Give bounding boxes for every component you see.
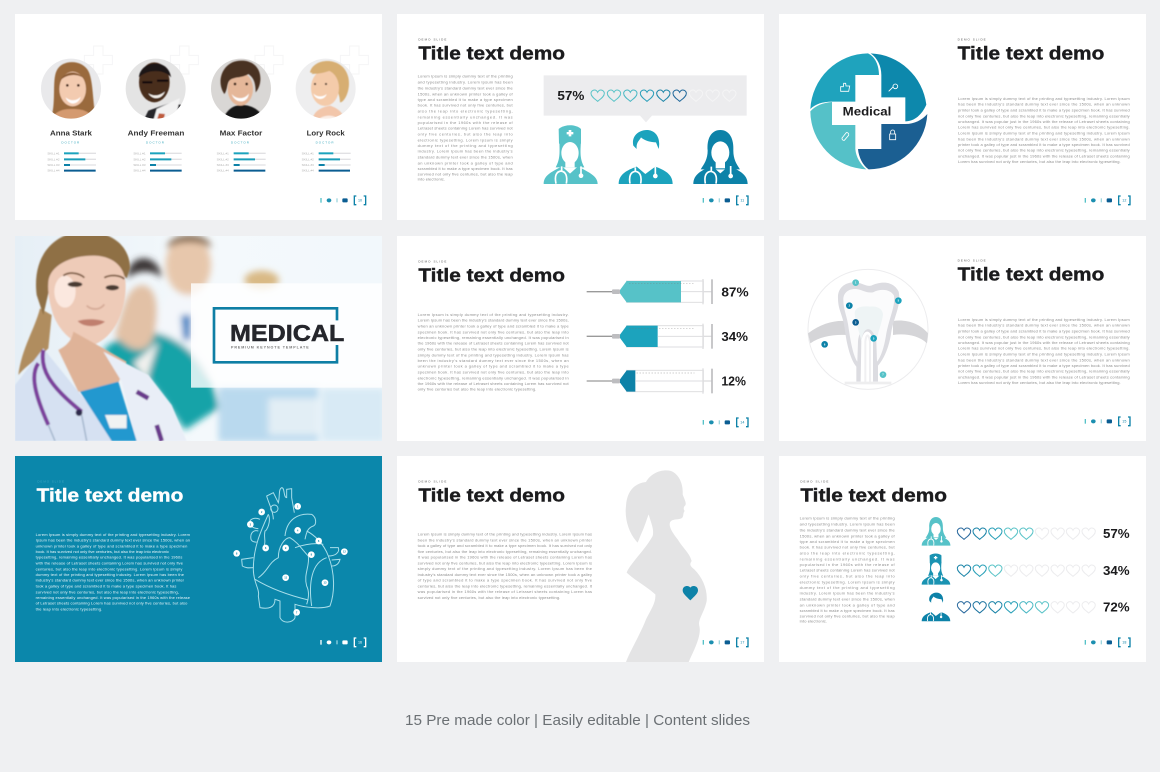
body text: has been the industry's standard dummy text ever since the 1500s, when an unknown bbox=[958, 102, 1130, 107]
body text: book. It has survived not only five centuries, but bbox=[800, 545, 896, 550]
icon: wrench bbox=[889, 84, 898, 91]
heart markers: 2 bbox=[261, 510, 263, 514]
body text: electronic typesetting. Lorem Ipsum is simply bbox=[800, 579, 895, 584]
body text: It was popularised in the 1960s with the release of Letraset sheets containing Lorem has bbox=[418, 555, 592, 560]
body text: Letraset sheets containing Lorem has survived not bbox=[800, 568, 896, 573]
body text: Lorem has survived not only five centuries, but also the leap into electronic typesetting. bbox=[958, 159, 1121, 164]
body text: five centuries, but also the leap into electronic typesetting, remaining essentially unchanged. bbox=[418, 549, 592, 554]
names: Andy Freeman bbox=[128, 130, 184, 137]
skill bars: Anna Stark: SKILL #3 bbox=[47, 163, 60, 167]
diagram: four-part circle with cross bbox=[810, 53, 927, 169]
label: DEMO SLIDE bbox=[418, 38, 447, 42]
footer: social icons and page number: 10 bbox=[358, 199, 362, 203]
body text: electronic typesetting. Lorem Ipsum is simply bbox=[418, 137, 513, 142]
body text: specimen book. It has survived not only five centuries, but also the leap into bbox=[418, 329, 569, 334]
body text: unknown printer took a galley of type and scrambled it to make a type bbox=[418, 364, 569, 369]
names: DOCTOR bbox=[316, 140, 335, 144]
heart markers: 9 bbox=[285, 546, 287, 550]
illustration: pregnant silhouette bbox=[626, 470, 707, 662]
body text: the leap into electronic typesetting. bbox=[36, 606, 102, 611]
body text: electronic typesetting, remaining essentially unchanged. It was popularised in bbox=[418, 335, 569, 340]
body text: Lorem Ipsum is simply dummy text of the printing and typesetting industry. Lorem Ipsum has bbox=[418, 532, 592, 537]
icon: thumbs up bbox=[841, 83, 850, 91]
skill bars: Max Factor: SKILL #1 bbox=[217, 151, 229, 155]
panel: translucent title panel bbox=[191, 283, 382, 388]
body text: unchanged. It was popular just in the 1960s with the release of Letraset sheets containing bbox=[958, 153, 1130, 158]
heart markers: 11 bbox=[284, 576, 288, 580]
body text: dummy text of the printing and typesetting bbox=[800, 585, 895, 590]
body text: and typesetting industry. Lorem Ipsum has been bbox=[800, 522, 895, 527]
slide 5: syringe percentages bbox=[397, 236, 764, 441]
body text: survived not only five centuries, but also the leap bbox=[418, 172, 513, 177]
body text: unknown printer took a galley of type and scrambled it to make a type specimen bbox=[36, 543, 187, 548]
body text: of type and scrambled it to make a type specimen book. It has survived not only five bbox=[418, 578, 593, 583]
row: 57 percent hearts: 57% bbox=[1103, 527, 1130, 541]
footer: social icons and page number: 14 bbox=[740, 421, 744, 425]
row: 57 percent hearts bbox=[922, 517, 1130, 546]
label: DEMO SLIDE bbox=[958, 258, 986, 262]
body text: popularised in the 1960s with the release of bbox=[800, 562, 896, 567]
body text: Lorem Ipsum is simply dummy text of the printing and typesetting industry. Lorem bbox=[36, 532, 191, 537]
syringe chart: 34 percent: 34% bbox=[721, 330, 748, 344]
body text: 1500s, when an unknown printer took a galley of bbox=[800, 533, 896, 538]
body text: survived not only five centuries, but also the leap into electronic typesetting. Lorem Ipsum is bbox=[418, 560, 592, 565]
body text: was popularised in the 1960s with the release of Letraset sheets containing Lorem has bbox=[418, 589, 592, 594]
title: Title text demo bbox=[418, 485, 565, 506]
body text: Lorem Ipsum is simply dummy text of the printing and typesetting industry. Lorem Ipsum bbox=[958, 130, 1130, 135]
syringe chart: 12 percent: 12% bbox=[721, 375, 746, 389]
marker 7: 7 bbox=[882, 373, 884, 377]
body text: survived not only five centuries, but also the leap into electronic typesetting. bbox=[418, 595, 560, 600]
title: Title text demo bbox=[418, 43, 565, 64]
body text bbox=[418, 532, 593, 600]
body text: into electronic. bbox=[418, 177, 445, 182]
heart markers: 8 bbox=[236, 551, 238, 555]
body text: typesetting, remaining essentially unchanged. It was popularised in the 1960s bbox=[36, 555, 182, 560]
body text bbox=[800, 516, 896, 624]
body text: type and scrambled it to make a type specimen bbox=[800, 539, 895, 544]
callout: 57 percent hearts bbox=[544, 75, 747, 122]
body text: centuries, but also the leap into electronic typesetting, remaining essentially unchanged. It bbox=[418, 583, 593, 588]
body text: Lorem has survived not only five centuries, but also the leap into electronic typesetting. bbox=[958, 380, 1121, 385]
body text: popularised in the 1960s with the release of bbox=[418, 120, 514, 125]
body text: the 1960s with the release of Letraset sheets containing Lorem has survived not bbox=[418, 381, 570, 386]
title: Title text demo bbox=[958, 264, 1104, 285]
body text: been the industry's standard dummy text ever since the 1500s, when an unknown printer bbox=[418, 537, 593, 542]
skill bars: Andy Freeman bbox=[133, 151, 182, 173]
skill bars: Max Factor: SKILL #4 bbox=[217, 169, 229, 173]
heart markers: 8 bbox=[311, 553, 313, 557]
slide 8: pregnancy silhouette bbox=[397, 456, 764, 662]
body text: industry. Lorem Ipsum has been the industry's bbox=[800, 591, 895, 596]
body text: with the release of Letraset sheets containing Lorem has survived not only five bbox=[36, 561, 184, 566]
body text: Letraset sheets containing Lorem has survived not bbox=[418, 126, 514, 131]
names: DOCTOR bbox=[61, 140, 80, 144]
icon: pill bbox=[842, 133, 849, 140]
body text: simply dummy text of the printing and typesetting industry. Lorem Ipsum has been the bbox=[418, 566, 593, 571]
body text: not only five centuries, but also the leap into electronic typesetting, remaining essentially bbox=[958, 369, 1130, 374]
skill bars: Andy Freeman: SKILL #4 bbox=[133, 169, 146, 173]
heart markers: 6 bbox=[318, 539, 320, 543]
body text: type and scrambled it to make a type specimen bbox=[418, 97, 513, 102]
body text: unchanged. It was popular just in the 1960s with the release of Letraset sheets containing bbox=[958, 340, 1130, 345]
marker 6: 6 bbox=[824, 342, 826, 346]
skill bars: Anna Stark: SKILL #1 bbox=[47, 151, 60, 155]
photo: Max Factor bbox=[210, 57, 273, 121]
body text: remaining essentially unchanged. It was bbox=[800, 556, 895, 561]
body text: not only five centuries, but also the leap into electronic typesetting, remaining essentially bbox=[958, 148, 1130, 153]
heart markers: 12 bbox=[343, 550, 346, 554]
logo: Medical frame bbox=[214, 308, 344, 362]
marker 3: 2 bbox=[849, 304, 851, 308]
body text: has been the industry's standard dummy text ever since the 1500s, when an unknown bbox=[958, 357, 1130, 362]
heart markers: 7 bbox=[296, 610, 298, 614]
footer: social icons and page number bbox=[1085, 417, 1130, 426]
body text: took a galley of type and scrambled it to make a type specimen book. It has bbox=[36, 583, 176, 588]
skill bars: Andy Freeman: SKILL #2 bbox=[133, 157, 146, 161]
footer: social icons and page number bbox=[703, 196, 748, 205]
label: DEMO SLIDE bbox=[958, 37, 986, 41]
body text: industry's standard dummy text ever since the 1500s, when an unknown printer bbox=[36, 578, 185, 583]
footer: social icons and page number: 15 bbox=[1122, 420, 1126, 424]
body text: also the leap into electronic typesetting, bbox=[800, 550, 895, 555]
body text: standard dummy text ever since the 1500s, when bbox=[800, 597, 895, 602]
body text: scrambled it to make a type specimen book. It has bbox=[800, 608, 895, 613]
logo: Medical frame: PREMIUM KEYNOTE TEMPLATE bbox=[231, 345, 309, 349]
body text: Lorem has survived not only five centuries, but also the leap into electronic typesetting. bbox=[958, 125, 1130, 130]
slide 3: medical cross diagram bbox=[779, 14, 1146, 220]
footer: social icons and page number bbox=[1085, 196, 1130, 205]
slide 6: tooth diagram bbox=[779, 236, 1146, 441]
body text: Lorem Ipsum is simply dummy text of the printing and typesetting industry. Lorem Ipsum bbox=[958, 96, 1130, 101]
body text: Lorem Ipsum is simply dummy text of the printing and typesetting industry. Lorem Ipsum bbox=[958, 351, 1130, 356]
body text: only five centuries but also the leap into electronic typesetting. bbox=[418, 387, 536, 392]
caption: 15 Pre made color | Easily editable | Content slides bbox=[405, 712, 750, 729]
heart markers bbox=[233, 503, 348, 616]
heart markers: 3 bbox=[250, 522, 252, 526]
names: DOCTOR bbox=[146, 140, 165, 144]
body text: unchanged. It was popular just in the 1960s with the release of Letraset sheets containing bbox=[958, 374, 1130, 379]
body text: Lorem Ipsum has been the industry's standard dummy text ever since the 1500s, bbox=[418, 318, 569, 323]
callout: 57 percent hearts: 57% bbox=[557, 89, 584, 103]
body text: into electronic. bbox=[800, 619, 827, 624]
skill bars: Lory Rock: SKILL #4 bbox=[302, 169, 314, 173]
marker 5: 5 bbox=[873, 336, 875, 340]
photo: Andy Freeman bbox=[126, 58, 186, 119]
skill bars: Andy Freeman: SKILL #1 bbox=[133, 151, 146, 155]
body text: scrambled it to make a type specimen book. It has bbox=[418, 166, 513, 171]
body text: been the industry's standard dummy text ever since the 1500s, when an bbox=[418, 358, 569, 363]
body text: dummy text of the printing and typesetting bbox=[418, 143, 513, 148]
body text: not only five centuries, but also the leap into electronic typesetting, remaining essentially bbox=[958, 334, 1130, 339]
slide 1: team profiles bbox=[15, 14, 382, 220]
body text: book. It has survived not only five centuries, but bbox=[418, 103, 514, 108]
title: Title text demo bbox=[958, 43, 1104, 64]
marker 4: 3 bbox=[855, 320, 857, 324]
body text: Lorem Ipsum is simply dummy text of the printing and typesetting industry. Lorem Ipsum bbox=[958, 317, 1130, 322]
skill bars: Andy Freeman: SKILL #3 bbox=[133, 163, 146, 167]
names: Anna Stark bbox=[50, 130, 92, 137]
skill bars: Lory Rock bbox=[302, 151, 351, 173]
body text: electronic typesetting, remaining essentially unchanged. It was popularised in bbox=[418, 375, 569, 380]
body text: unchanged. It was popular just in the 1960s with the release of Letraset sheets containing bbox=[958, 119, 1130, 124]
row: 72 percent hearts bbox=[922, 593, 1130, 621]
marker 2: 5 bbox=[898, 299, 900, 303]
body text: industry's standard dummy text ever since the 1500s, when an unknown printer took a galley bbox=[418, 572, 592, 577]
icon: heart bbox=[683, 586, 698, 600]
skill bars: Anna Stark bbox=[47, 151, 96, 173]
diagram: heart outline bbox=[242, 488, 340, 622]
footer: social icons and page number bbox=[1085, 638, 1130, 647]
body text: dummy text of the printing and typesetting industry. Lorem Ipsum has been the bbox=[36, 572, 185, 577]
body text: Lorem Ipsum is simply dummy text of the printing bbox=[800, 516, 895, 521]
footer: social icons and page number: 16 bbox=[358, 641, 362, 645]
title: Title text demo bbox=[800, 485, 947, 506]
row: 34 percent hearts: 34% bbox=[1103, 564, 1130, 578]
footer: social icons and page number: 18 bbox=[1122, 641, 1126, 645]
title: Title text demo bbox=[37, 485, 183, 506]
skill bars: Max Factor: SKILL #2 bbox=[217, 157, 229, 161]
body text bbox=[418, 74, 514, 182]
body text: the industry's standard dummy text ever since the bbox=[800, 527, 895, 532]
slide 7: heart diagram on blue bbox=[15, 456, 382, 662]
footer: social icons and page number: 17 bbox=[740, 641, 744, 645]
syringe chart: 12 percent bbox=[587, 368, 746, 394]
heart markers: 6 bbox=[265, 546, 267, 550]
body text: and typesetting industry. Lorem Ipsum has been bbox=[418, 80, 513, 85]
body text: Lorem Ipsum is simply dummy text of the printing and typesetting industry. bbox=[418, 312, 569, 317]
skill bars: Anna Stark: SKILL #2 bbox=[47, 157, 60, 161]
names: DOCTOR bbox=[231, 140, 250, 144]
icon: padlock bbox=[890, 130, 896, 140]
body text: specimen book. It has survived not only five centuries, but also the leap into bbox=[418, 369, 569, 374]
names: Max Factor bbox=[220, 130, 263, 137]
body text: has been the industry's standard dummy text ever since the 1500s, when an unknown bbox=[958, 136, 1130, 141]
body text: not only five centuries, but also the leap into electronic typesetting, remaining essentially bbox=[958, 113, 1130, 118]
label: DEMO SLIDE bbox=[418, 480, 447, 484]
body text: has been the industry's standard dummy text ever since the 1500s, when an unknown bbox=[958, 323, 1130, 328]
skill bars: Max Factor: SKILL #3 bbox=[217, 163, 229, 167]
body text: printer took a galley of type and scrambled it to make a type specimen book. It has survived bbox=[958, 363, 1130, 368]
body text: book. It has survived not only five centuries, but also the leap into electronic bbox=[36, 549, 169, 554]
body text: the 1960s with the release of Letraset sheets containing Lorem has survived not bbox=[418, 341, 570, 346]
body text bbox=[36, 532, 191, 611]
body text: an unknown printer took a galley of type and bbox=[418, 160, 513, 165]
syringe chart: 34 percent bbox=[587, 324, 748, 349]
syringe chart: 87 percent bbox=[587, 279, 749, 304]
photo: Anna Stark bbox=[41, 58, 101, 119]
row: 72 percent hearts: 72% bbox=[1103, 601, 1130, 615]
skill bars: Lory Rock: SKILL #3 bbox=[302, 163, 314, 167]
skill bars: Anna Stark: SKILL #4 bbox=[47, 169, 60, 173]
skill bars: Lory Rock: SKILL #2 bbox=[302, 157, 314, 161]
body text: only five centuries, but also the leap into electronic typesetting. Lorem Ipsum is bbox=[418, 346, 569, 351]
slide 4: cover with photo of medical staff bbox=[15, 232, 385, 442]
slide 2: title, text and people with hearts bbox=[397, 14, 764, 220]
body text: only five centuries, but also the leap into bbox=[418, 132, 513, 137]
heart markers: 1 bbox=[297, 504, 299, 508]
body text: industry. Lorem Ipsum has been the industry's bbox=[418, 149, 513, 154]
skill bars: Max Factor bbox=[217, 151, 266, 173]
footer: social icons and page number bbox=[703, 638, 748, 647]
footer: social icons and page number: 11 bbox=[740, 199, 744, 203]
body text: also the leap into electronic typesetting, bbox=[418, 108, 513, 113]
diagram: tooth anatomy bbox=[808, 269, 928, 389]
heart markers: 4 bbox=[297, 528, 299, 532]
photo: medical staff bbox=[15, 232, 385, 442]
footer: social icons and page number: 12 bbox=[1122, 199, 1126, 203]
body text bbox=[958, 96, 1130, 164]
body text bbox=[958, 317, 1130, 385]
body text: Lorem has survived not only five centuries, but also the leap into electronic typesetting. bbox=[958, 346, 1130, 351]
body text: simply dummy text of the printing and typesetting industry. Lorem Ipsum has bbox=[418, 352, 569, 357]
body text: an unknown printer took a galley of type and bbox=[800, 602, 895, 607]
body text: survived not only five centuries, but also the leap into electronic typesetting, bbox=[36, 589, 179, 594]
body text: remaining essentially unchanged. It was bbox=[418, 114, 513, 119]
names: Lory Rock bbox=[307, 130, 345, 137]
label: DEMO SLIDE bbox=[418, 259, 447, 263]
body text: Lorem Ipsum is simply dummy text of the printing bbox=[418, 74, 513, 79]
body text: printer took a galley of type and scrambled it to make a type specimen book. It has survived bbox=[958, 142, 1130, 147]
names bbox=[50, 130, 345, 144]
label: DEMO SLIDE bbox=[37, 480, 65, 484]
body text: took a galley of type and scrambled it to make a type specimen book. It has survived not only bbox=[418, 543, 592, 548]
body text bbox=[418, 312, 570, 392]
body text: printer took a galley of type and scrambled it to make a type specimen book. It has survived bbox=[958, 328, 1130, 333]
footer: social icons and page number bbox=[703, 418, 748, 427]
slide 9: hearts rating by staff bbox=[779, 456, 1146, 662]
label: Medical: Medical bbox=[843, 105, 891, 119]
body text: only five centuries, but also the leap into bbox=[800, 574, 895, 579]
body text: Ipsum has been the industry's standard dummy text ever since the 1500s, when an bbox=[36, 538, 190, 543]
body text: 1500s, when an unknown printer took a galley of bbox=[418, 91, 514, 96]
skill bars: Lory Rock: SKILL #1 bbox=[302, 151, 314, 155]
body text: survived not only five centuries, but also the leap bbox=[800, 614, 895, 619]
footer: social icons and page number bbox=[321, 196, 366, 205]
body text: printer took a galley of type and scrambled it to make a type specimen book. It has survived bbox=[958, 107, 1130, 112]
footer: social icons and page number bbox=[321, 638, 366, 647]
logo: Medical frame: MEDICAL bbox=[230, 320, 344, 346]
icon: male doctor bbox=[619, 130, 673, 184]
syringe chart: 87 percent: 87% bbox=[721, 285, 749, 299]
body text: centuries, but also the leap into electronic typesetting. Lorem Ipsum is simply bbox=[36, 566, 182, 571]
title: Title text demo bbox=[418, 265, 565, 286]
body text: the industry's standard dummy text ever since the bbox=[418, 85, 513, 90]
body text: of Letraset sheets containing Lorem has survived not only five centuries, but also bbox=[36, 601, 188, 606]
photo: Lory Rock bbox=[295, 57, 357, 121]
marker 1: 1 bbox=[855, 281, 857, 285]
body text: when an unknown printer took a galley of type and scrambled it to make a type bbox=[418, 323, 569, 328]
icon: nurse bbox=[544, 125, 598, 184]
label: DEMO SLIDE bbox=[800, 480, 829, 484]
icon: female doctor bbox=[693, 130, 748, 184]
heart markers: 13 bbox=[324, 581, 327, 585]
body text: remaining essentially unchanged. It was popularised in the 1960s with the release bbox=[36, 595, 191, 600]
row: 34 percent hearts bbox=[922, 553, 1130, 585]
body text: standard dummy text ever since the 1500s, when bbox=[418, 155, 513, 160]
